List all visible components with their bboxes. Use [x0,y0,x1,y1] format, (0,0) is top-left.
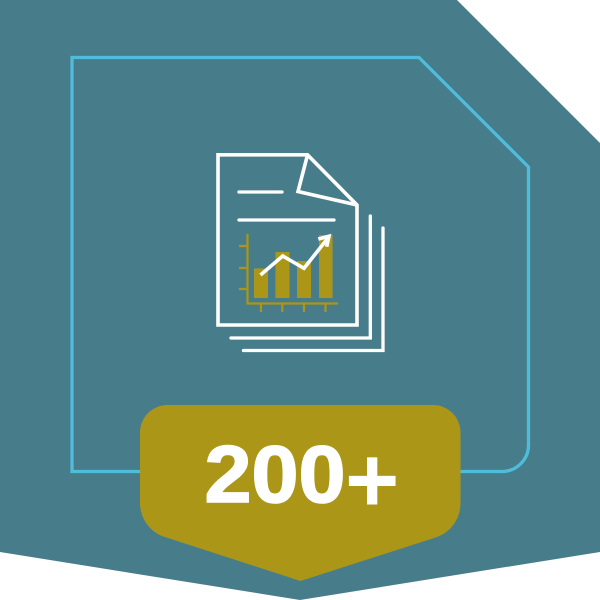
badge number [204,428,399,532]
front page with folded corner [218,155,357,325]
badge [140,405,461,581]
icon: report document stack with chart [218,155,383,350]
inner outline frame [72,58,528,472]
chart axes [239,234,338,312]
bar chart bars [254,235,332,298]
badge shape [140,405,461,581]
badge number: + [345,428,399,532]
trend arrow [260,236,329,275]
text lines [239,192,334,220]
back pages [231,216,383,350]
badge number: 200 [204,430,346,520]
